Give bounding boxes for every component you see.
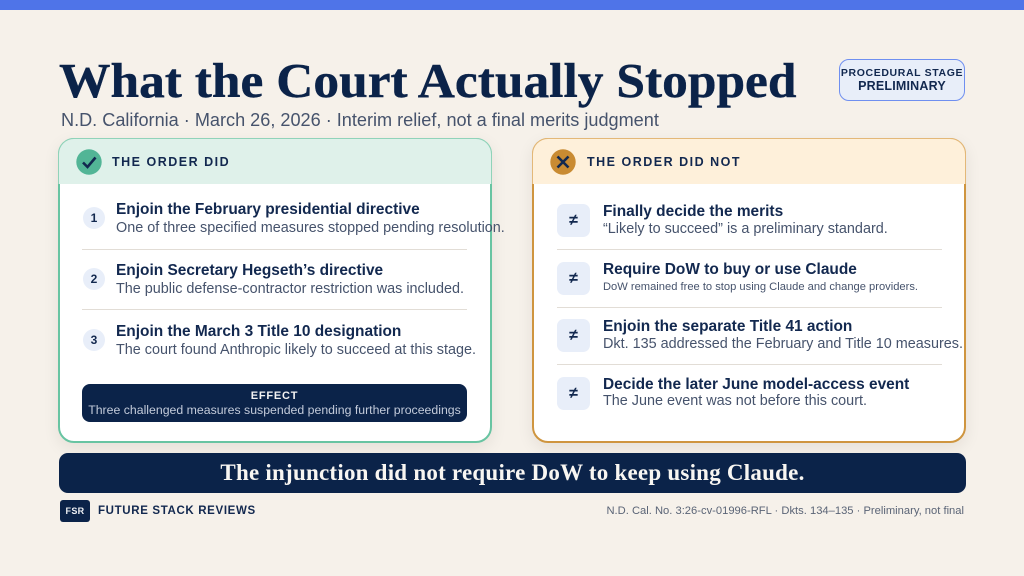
- item 2 heading: Enjoin Secretary Hegseth’s directive: [116, 262, 383, 279]
- item 1 text: One of three specified measures stopped pending resolution.: [116, 220, 505, 236]
- not-equal icon: ≠: [569, 212, 578, 229]
- item 3 text: The court found Anthropic likely to succeed at this stage.: [116, 342, 476, 358]
- effect label: EFFECT: [251, 390, 298, 402]
- item 3 heading: Enjoin the March 3 Title 10 designation: [116, 323, 401, 340]
- badge value: PRELIMINARY: [858, 79, 946, 93]
- item 3: [83, 323, 476, 358]
- number 1: 1: [91, 211, 97, 225]
- badge label: PROCEDURAL STAGE: [841, 67, 963, 79]
- logo: FSR: [60, 500, 90, 522]
- item 2: [83, 262, 464, 297]
- item B: [557, 261, 918, 295]
- brand name: FUTURE STACK REVIEWS: [98, 505, 256, 517]
- number 3: [83, 329, 105, 351]
- icon: cross: [550, 149, 576, 175]
- logo: FSR: FSR: [66, 506, 84, 516]
- top accent bar: [0, 0, 1024, 10]
- item D heading: Decide the later June model-access event: [603, 376, 909, 393]
- takeaway banner: [59, 453, 966, 493]
- item B text: DoW remained free to stop using Claude and change providers.: [603, 281, 918, 293]
- effect text: Three challenged measures suspended pending further proceedings: [88, 403, 461, 417]
- panel header: [58, 138, 492, 184]
- item 2 text: The public defense-contractor restriction was included.: [116, 281, 464, 297]
- icon: check: [76, 149, 102, 175]
- badge: procedural stage: [839, 59, 965, 101]
- takeaway banner: The injunction did not require DoW to keep using Claude.: [220, 460, 805, 485]
- heading: the order did not: THE ORDER DID NOT: [587, 155, 741, 169]
- not-equal icon: [557, 204, 590, 237]
- heading: the order did: THE ORDER DID: [112, 155, 230, 169]
- number 1: [83, 207, 105, 229]
- not-equal icon: ≠: [569, 385, 578, 402]
- item C heading: Enjoin the separate Title 41 action: [603, 318, 852, 335]
- effect callout: [82, 384, 467, 422]
- not-equal icon: [557, 262, 590, 295]
- item A heading: Finally decide the merits: [603, 203, 783, 220]
- title: What the Court Actually Stopped: [59, 53, 797, 108]
- item 1 heading: Enjoin the February presidential directive: [116, 201, 420, 218]
- not-equal icon: ≠: [569, 270, 578, 287]
- number 2: 2: [91, 272, 97, 286]
- panel: the order did: [58, 138, 492, 443]
- item C text: Dkt. 135 addressed the February and Title 10 measures.: [603, 336, 963, 352]
- item D: [557, 376, 910, 410]
- source note: N.D. Cal. No. 3:26-cv-01996-RFL · Dkts. 134–135 · Preliminary, not final: [606, 505, 964, 517]
- number 3: 3: [91, 333, 97, 347]
- panel header: [532, 138, 966, 184]
- not-equal icon: [557, 377, 590, 410]
- subtitle: N.D. California · March 26, 2026 · Interim relief, not a final merits judgment: [61, 110, 659, 130]
- not-equal icon: ≠: [569, 327, 578, 344]
- item A text: “Likely to succeed” is a preliminary standard.: [603, 221, 888, 237]
- item D text: The June event was not before this court.: [603, 393, 867, 409]
- item C: [557, 318, 963, 352]
- item A: [557, 203, 888, 237]
- not-equal icon: [557, 319, 590, 352]
- item B heading: Require DoW to buy or use Claude: [603, 261, 857, 278]
- number 2: [83, 268, 105, 290]
- panel: the order did not: [532, 138, 966, 443]
- item 1: [83, 201, 505, 236]
